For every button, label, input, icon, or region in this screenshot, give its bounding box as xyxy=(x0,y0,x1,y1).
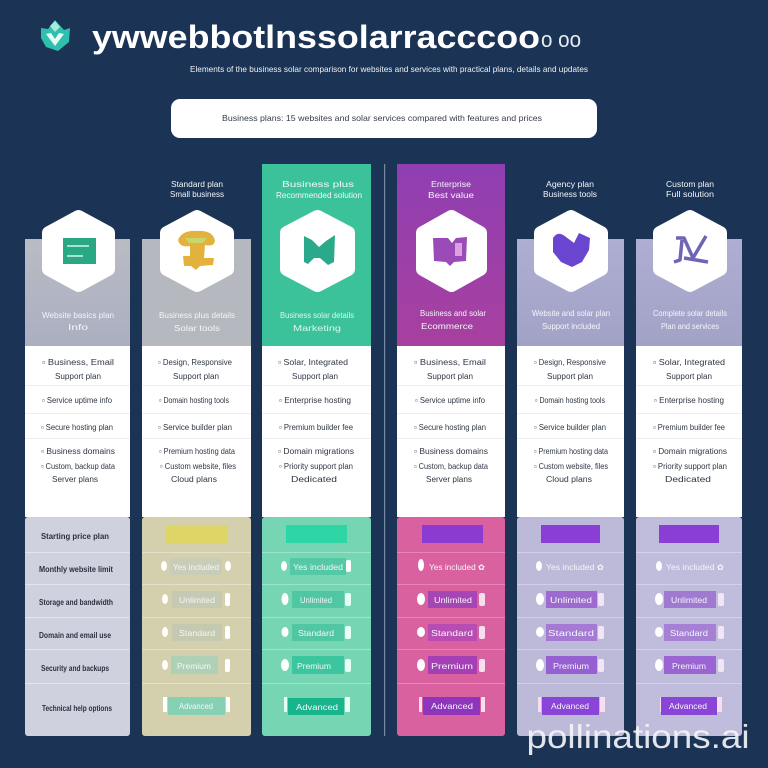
comparison rows 6: Premium xyxy=(672,662,706,671)
feature list 4 xyxy=(397,346,505,517)
column 6 xyxy=(636,180,742,736)
header panel 6: Complete solar details xyxy=(653,309,727,318)
comparison rows 4: Unlimited xyxy=(434,596,472,605)
header panel 1: Website basics plan xyxy=(42,311,114,320)
comparison rows 3: Yes included xyxy=(293,563,343,572)
header panel 3 xyxy=(262,164,371,346)
column 5 xyxy=(517,180,624,736)
comparison rows 6: Yes included ✿ xyxy=(666,563,724,572)
header panel 5: Website and solar plan xyxy=(532,309,610,318)
caption 5: Business tools xyxy=(543,190,597,199)
feature list 3: Dedicated xyxy=(291,475,337,484)
header panel 4: Best value xyxy=(428,191,475,200)
feature list 2: Cloud plans xyxy=(171,475,217,484)
feature list 6: ▫ Solar, Integrated xyxy=(653,358,725,367)
header panel 2: Business plus details xyxy=(159,311,235,320)
icon: yellow emblem xyxy=(178,231,215,270)
comparison rows 6: Standard xyxy=(670,629,708,638)
feature list 3: ▫ Premium builder fee xyxy=(279,423,354,432)
comparison rows 3: Advanced xyxy=(296,703,338,712)
comparison rows 3: Premium xyxy=(297,662,331,671)
feature list 6 xyxy=(636,346,742,517)
feature list 3: Support plan xyxy=(292,372,338,381)
feature list 4: ▫ Service uptime info xyxy=(415,396,486,405)
highlight banner: Business plans: 15 websites and solar services compared with features and prices xyxy=(222,113,542,123)
feature list 3: ▫ Domain migrations xyxy=(278,447,354,456)
header panel 4: Business and solar xyxy=(420,309,486,318)
feature list 5: Support plan xyxy=(547,372,593,381)
feature list 6: ▫ Domain migrations xyxy=(653,447,727,456)
feature list 5 xyxy=(517,346,624,517)
title: o oo xyxy=(541,27,581,52)
comparison rows 6: Unlimited xyxy=(671,596,707,605)
feature list 1 xyxy=(25,346,130,517)
comparison rows 4: Yes included ✿ xyxy=(429,563,485,572)
column 4 featured xyxy=(397,164,505,736)
caption 5 xyxy=(543,180,597,199)
center divider xyxy=(384,164,385,736)
feature list 4: Support plan xyxy=(427,372,473,381)
header panel 6 xyxy=(636,217,742,346)
comparison rows 5: Unlimited xyxy=(550,596,592,605)
watermark: pollinations.ai xyxy=(526,718,750,755)
title: ywwebbotlnssolarracccoo xyxy=(92,19,540,55)
header panel 5 xyxy=(517,217,624,346)
feature list 6: Support plan xyxy=(666,372,712,381)
header panel 3: Marketing xyxy=(293,324,341,333)
comparison rows 3: Unlimited xyxy=(300,596,332,605)
feature list 6: Dedicated xyxy=(665,475,711,484)
icon: check mark xyxy=(674,236,708,262)
header panel 4 xyxy=(397,164,505,346)
feature list 4: ▫ Business domains xyxy=(414,447,488,456)
header panel 3: Business plus xyxy=(282,180,354,189)
comparison rows 2: Premium xyxy=(177,662,211,671)
header panel 2 xyxy=(142,217,251,346)
feature list 1: ▫ Service uptime info xyxy=(42,396,113,405)
comparison rows 5: Advanced xyxy=(551,702,589,711)
comparison rows 5: Standard xyxy=(548,629,594,638)
feature list 2: ▫ Custom website, files xyxy=(160,462,236,471)
feature list 5: ▫ Domain hosting tools xyxy=(535,396,605,405)
feature list 1: ▫ Business, Email xyxy=(42,358,114,367)
comparison rows 2 xyxy=(142,517,251,736)
header panel 4: Enterprise xyxy=(431,180,472,189)
feature list 1: Support plan xyxy=(55,372,101,381)
feature list 5: ▫ Design, Responsive xyxy=(534,358,607,367)
comparison rows 3: Standard xyxy=(298,629,334,638)
comparison rows 1: Starting price plan xyxy=(41,532,109,541)
feature list 3 xyxy=(262,346,371,517)
comparison rows 3 xyxy=(262,517,371,736)
feature list 5: Cloud plans xyxy=(546,475,592,484)
column 1 xyxy=(25,217,130,736)
comparison rows 5: Premium xyxy=(553,662,589,671)
comparison rows 6: Advanced xyxy=(669,702,707,711)
comparison rows 1 xyxy=(25,517,130,736)
feature list 3: ▫ Solar, Integrated xyxy=(278,358,348,367)
comparison rows 1: Technical help options xyxy=(42,704,112,713)
icon: purple shield xyxy=(553,233,590,267)
feature list 4: ▫ Business, Email xyxy=(414,358,486,367)
feature list 2: ▫ Domain hosting tools xyxy=(159,396,229,405)
comparison rows 2: Advanced xyxy=(179,702,213,711)
feature list 5: ▫ Custom website, files xyxy=(534,462,608,471)
header panel 1: Info xyxy=(68,323,89,332)
feature list 6: ▫ Enterprise hosting xyxy=(654,396,724,405)
feature list 1: ▫ Custom, backup data xyxy=(41,462,116,471)
header panel 5: Support included xyxy=(542,322,600,331)
caption 2: Standard plan xyxy=(171,180,223,189)
header panel 6: Plan and services xyxy=(661,322,719,331)
header panel 3: Recommended solution xyxy=(276,191,362,200)
feature list 2: ▫ Service builder plan xyxy=(158,423,232,432)
feature list 2 xyxy=(142,346,251,517)
caption 2 xyxy=(170,180,224,199)
feature list 2: Support plan xyxy=(173,372,219,381)
comparison rows 2: Standard xyxy=(179,629,215,638)
comparison rows 1: Domain and email use xyxy=(39,631,111,640)
feature list 2: ▫ Design, Responsive xyxy=(158,358,233,367)
comparison rows 4: Advanced xyxy=(431,702,473,711)
comparison rows 4: Standard xyxy=(431,629,473,638)
caption 6 xyxy=(666,180,714,199)
feature list 1: ▫ Business domains xyxy=(41,447,115,456)
feature list 3: ▫ Priority support plan xyxy=(279,462,353,471)
column 2 xyxy=(142,180,251,736)
feature list 5: ▫ Premium hosting data xyxy=(534,447,608,456)
icon: teal M xyxy=(304,235,335,265)
column 3 featured xyxy=(262,164,371,736)
comparison rows 1: Monthly website limit xyxy=(39,565,113,574)
feature list 1: Server plans xyxy=(52,475,98,484)
comparison rows 5 xyxy=(517,517,624,736)
feature list 4: ▫ Secure hosting plan xyxy=(414,423,486,432)
subtitle: Elements of the business solar comparison for websites and services with practical plans, details and updates xyxy=(190,64,588,74)
logo icon xyxy=(41,20,70,51)
feature list 4: ▫ Custom, backup data xyxy=(414,462,489,471)
feature list 6: ▫ Premium builder fee xyxy=(653,423,726,432)
highlight banner xyxy=(171,99,597,138)
icon: card xyxy=(63,238,96,264)
icon: purple M xyxy=(433,237,467,266)
caption 6: Full solution xyxy=(666,190,714,199)
feature list 3: ▫ Enterprise hosting xyxy=(279,396,351,405)
comparison rows 5: Yes included ✿ xyxy=(546,563,604,572)
feature list 2: ▫ Premium hosting data xyxy=(159,447,236,456)
feature list 5: ▫ Service builder plan xyxy=(534,423,606,432)
header panel 4: Ecommerce xyxy=(421,322,474,331)
header panel 2: Solar tools xyxy=(174,324,220,333)
comparison rows 1: Security and backups xyxy=(41,664,109,673)
comparison rows 2: Yes included xyxy=(173,563,219,572)
header panel 3: Business solar details xyxy=(280,311,354,320)
feature list 1: ▫ Secure hosting plan xyxy=(41,423,113,432)
comparison rows 2: Unlimited xyxy=(179,596,215,605)
comparison rows 6 xyxy=(636,517,742,736)
caption 2: Small business xyxy=(170,190,224,199)
feature list 6: ▫ Priority support plan xyxy=(653,462,727,471)
header panel 1 xyxy=(25,217,130,346)
caption 5: Agency plan xyxy=(546,180,594,189)
comparison rows 4: Premium xyxy=(431,662,473,671)
feature list 4: Server plans xyxy=(426,475,472,484)
caption 6: Custom plan xyxy=(666,180,714,189)
comparison rows 1: Storage and bandwidth xyxy=(39,598,113,607)
comparison rows 4 xyxy=(397,517,505,736)
